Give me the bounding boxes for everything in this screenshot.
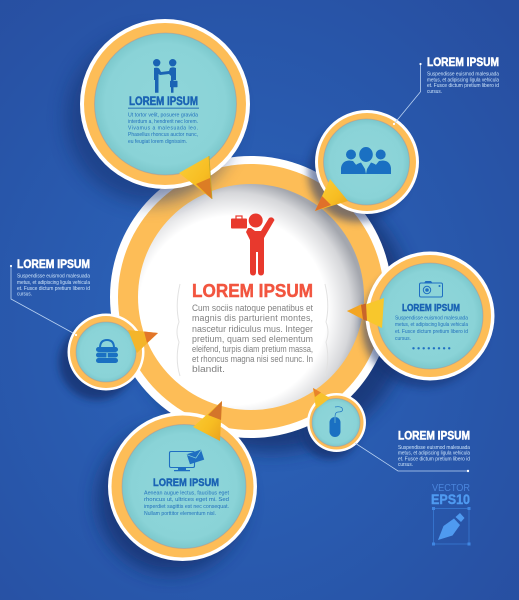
callout: left: [10, 259, 90, 336]
callout: bottom right: metus, et adipiscing ligula vehicula: [398, 451, 470, 457]
panel: top right circle: [315, 110, 419, 214]
icon: lock: [96, 340, 118, 363]
text block: central: et rhoncus magna nisi sed nunc. In: [192, 354, 313, 364]
text block: right: [395, 316, 468, 342]
text block: right: et. Fusce dictum pretium libero id: [395, 329, 468, 335]
callout: bottom right: Suspendisse euismod malesuada: [398, 445, 470, 451]
text block: central: [192, 303, 314, 374]
heading: top left: LOREM IPSUM: [129, 96, 198, 108]
text block: bottom: imperdiet sagittis est nec consequat.: [144, 504, 229, 510]
flag: right: [347, 298, 384, 328]
panel: central circle: [110, 156, 392, 438]
icon: person with briefcase: [231, 214, 274, 276]
badge: vector eps10: VECTOR: [432, 482, 470, 494]
callout: left: LOREM IPSUM: [17, 259, 90, 271]
heading: central: LOREM IPSUM: [192, 280, 313, 301]
text block: bottom: [144, 490, 230, 517]
badge: vector eps10: [431, 482, 470, 546]
callout: bottom right: LOREM IPSUM: [398, 430, 470, 442]
text block: right: cursus.: [395, 336, 411, 342]
icon: handshake: [153, 59, 178, 93]
text block: top left: Vivamus a malesuada leo.: [128, 126, 198, 132]
callout: top right: et. Fusce dictum pretium libero id: [427, 83, 499, 89]
callout: top right: cursus.: [427, 89, 442, 95]
icon: mouse: [330, 407, 342, 437]
text block: bottom: Aenean augue lectus, faucibus eget: [144, 490, 230, 496]
callout: left: et. Fusce dictum pretium libero id: [17, 286, 90, 292]
callout: top right: [393, 57, 499, 125]
icon: camera: [420, 281, 442, 297]
badge: vector eps10: EPS10: [431, 492, 470, 507]
drop shadows: [59, 172, 411, 574]
callout: top right: metus, et adipiscing ligula vehicula: [427, 77, 499, 83]
callout: left: Suspendisse euismod malesuada: [17, 274, 90, 280]
panel: bottom circle: [108, 412, 257, 561]
icon: pen nib: [438, 513, 464, 540]
text block: central: eleifend, turpis diam pretium massa,: [192, 344, 313, 354]
callout: top right: Suspendisse euismod malesuada: [427, 72, 499, 78]
text block: top left: eu feugiat lorem dignissim.: [128, 139, 187, 145]
text block: bottom: rhoncus ut, ultrices eget mi. Sed: [144, 497, 229, 503]
icon: team: [341, 147, 391, 174]
panel: right circle: [366, 252, 494, 380]
text block: central: magnis dis parturient montes,: [192, 313, 313, 323]
overlapping shadows on central circle: [66, 33, 486, 388]
callout: left: cursus.: [17, 292, 32, 298]
text block: top left: Ut tortor velit, posuere gravida: [128, 112, 198, 118]
text block: top left: Phasellus rhoncus auctor nunc,: [128, 132, 198, 138]
flag: bottom: [193, 401, 222, 441]
flag: left: [128, 330, 158, 353]
text block: right: metus, et adipiscing ligula vehicula: [395, 322, 468, 328]
callout: bottom right: et. Fusce dictum pretium libero id: [398, 456, 470, 462]
text block: top left: [128, 112, 198, 145]
panel: top left circle: [80, 19, 250, 189]
text block: right: Suspendisse euismod malesuada: [395, 316, 468, 322]
callout: bottom right: [355, 430, 470, 472]
flag: top left: [179, 156, 212, 199]
text block: central: Cum sociis natoque penatibus et: [192, 303, 314, 313]
dots row: [412, 347, 450, 349]
flag: top right: [315, 179, 348, 211]
heading: bottom: LOREM IPSUM: [153, 477, 219, 489]
callout: bottom right: cursus.: [398, 462, 413, 468]
text block: central: nascetur ridiculus mus. Integer: [192, 324, 313, 334]
text block: bottom: Nullam porttitor elementum nisl.: [144, 511, 216, 517]
panel: left circle: [68, 314, 144, 390]
callout: top right: LOREM IPSUM: [427, 57, 499, 69]
panel: mouse circle: [307, 393, 366, 452]
text block: central: pretium, quam sed elementum: [192, 334, 313, 344]
icon: monitor and envelope: [170, 450, 204, 471]
text block: central: blandit.: [192, 364, 225, 374]
flag: mouse circle: [313, 388, 330, 409]
text block: top left: interdum a, hendrerit nec lorem.: [128, 119, 198, 125]
callout: left: metus, et adipiscing ligula vehicula: [17, 280, 90, 286]
heading: right: LOREM IPSUM: [402, 303, 460, 314]
